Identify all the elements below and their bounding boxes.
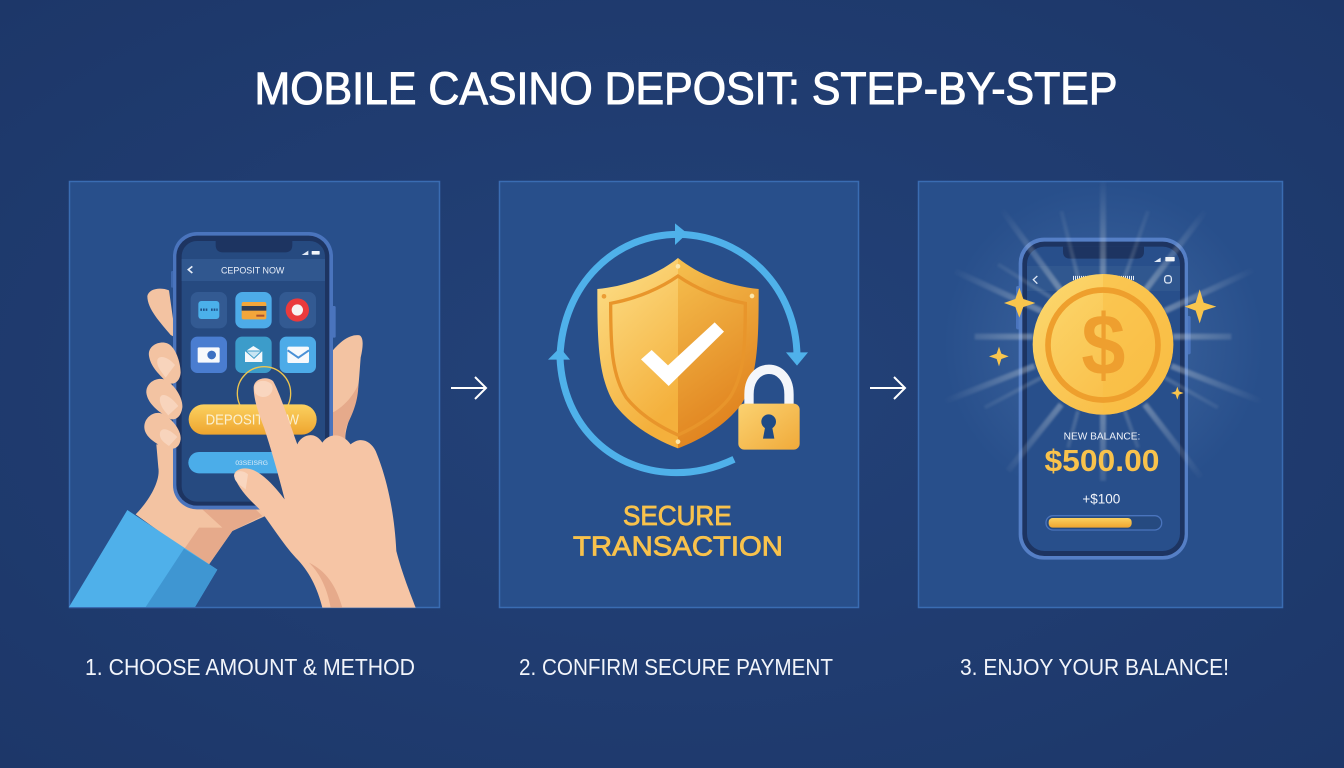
icon: shield with check: [597, 258, 759, 448]
panel: step 2 secure transaction: [500, 182, 858, 608]
text: secure transaction: SECURE: [623, 500, 732, 531]
caption: step 2: 2. CONFIRM SECURE PAYMENT: [519, 654, 833, 680]
icon: phone: [1016, 238, 1191, 560]
caption: step 3: 3. ENJOY YOUR BALANCE!: [960, 654, 1229, 680]
glow: [943, 184, 1263, 504]
arrow: step 2 to step 3: [870, 377, 905, 399]
icon: coin: [1033, 274, 1173, 415]
panel: step 3 enjoy balance: [918, 181, 1282, 608]
payment method icons: [191, 292, 316, 373]
light rays: [956, 188, 1250, 481]
phone header: deposit now: CEPOSIT NOW: [221, 265, 285, 275]
icon: blue sleeve: [69, 510, 217, 607]
text: new balance: NEW BALANCE:: [1064, 431, 1140, 442]
tap ring: [237, 367, 291, 420]
text: plus amount: +$100: [1082, 490, 1121, 506]
button: deposit now: [189, 404, 317, 435]
arrow: step 1 to step 2: [451, 377, 486, 399]
icon: tapping hand: [234, 378, 416, 608]
icon: coin: $: [1081, 297, 1125, 393]
icon: sparkles: [989, 288, 1216, 400]
icon: left-hand fingers: [144, 343, 182, 449]
icon: holding hand behind phone: [136, 289, 363, 564]
icon: phone: [171, 232, 336, 509]
button: secondary: [188, 452, 288, 473]
icon: padlock: [738, 369, 800, 450]
text: secure transaction: [573, 500, 783, 562]
button: secondary: 03SEISRG: [235, 460, 268, 467]
text: secure transaction: TRANSACTION: [573, 531, 783, 562]
icon: circular arrows: [548, 223, 808, 473]
caption: step 1: 1. CHOOSE AMOUNT & METHOD: [85, 654, 415, 680]
button: deposit now: DEPOSIT NOW: [206, 413, 299, 429]
phone header: deposit now: [182, 259, 325, 281]
text: balance amount: $500.00: [1044, 444, 1159, 478]
title: MOBILE CASINO DEPOSIT: STEP-BY-STEP: [254, 63, 1118, 114]
panel: step 1 choose amount and method: [69, 182, 440, 608]
progress bar: [1046, 516, 1162, 530]
